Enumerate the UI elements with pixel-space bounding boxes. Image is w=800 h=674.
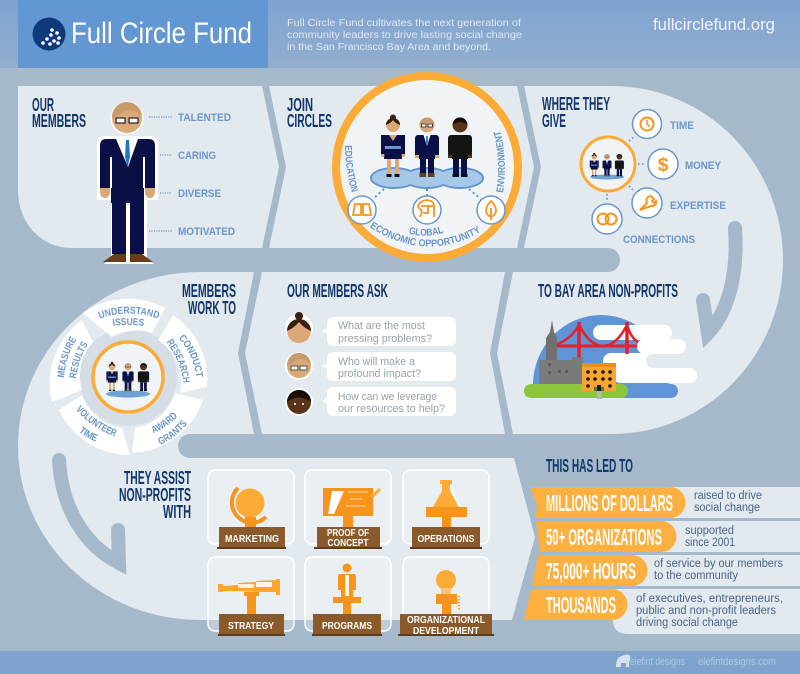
result: 75,000+ hours	[532, 555, 800, 586]
header description: community leaders to drive lasting social change	[287, 29, 522, 41]
result: 75,000+ hours: of service by our members	[654, 558, 783, 570]
icon: money: $	[658, 155, 669, 176]
member traits: DIVERSE	[178, 188, 221, 200]
result: thousands	[524, 589, 800, 634]
heading: our members: MEMBERS	[32, 111, 86, 131]
dotted links	[607, 137, 646, 202]
question three	[285, 387, 456, 416]
question three: our resources to help?	[338, 403, 445, 415]
circle labels: ECONOMIC OPPORTUNITY	[370, 222, 479, 247]
logo wordmark: Full Circle Fund	[71, 17, 252, 50]
give labels	[623, 120, 726, 246]
card: organizational development: ORGANIZATIONAL	[407, 615, 485, 626]
circle labels: GLOBAL	[409, 226, 444, 236]
clouds	[593, 325, 697, 383]
card: marketing: MARKETING	[225, 534, 279, 545]
result: thousands: public and non-profit leaders	[636, 605, 776, 617]
icon: global head	[413, 196, 441, 224]
heading: members work to: WORK TO	[188, 298, 236, 318]
sky	[533, 315, 669, 385]
icon: elephant	[616, 654, 630, 667]
wheel segments	[50, 299, 207, 455]
heading: they assist non-profits with	[119, 468, 191, 522]
heading: to bay area non-profits: TO BAY AREA NON-PROFITS	[538, 281, 678, 301]
card: strategy	[208, 557, 294, 636]
give labels: CONNECTIONS	[623, 234, 695, 246]
result: millions of dollars: raised to drive	[694, 490, 762, 502]
icon: education book	[348, 196, 376, 224]
heading: members work to	[182, 281, 236, 318]
heading: this has led to: THIS HAS LED TO	[546, 456, 633, 476]
members work to wheel	[50, 298, 208, 455]
wheel labels: MEASURE	[57, 336, 76, 378]
question two: Who will make a	[338, 356, 416, 368]
member traits: CARING	[178, 150, 216, 162]
result: 50+ organizations: 50+ ORGANIZATIONS	[546, 524, 662, 550]
heading: our members: OUR	[32, 95, 54, 115]
footer band	[0, 651, 800, 674]
heading: where they give: GIVE	[542, 111, 566, 131]
result: 75,000+ hours: 75,000+ HOURS	[546, 558, 636, 584]
circle labels: EDUCATION	[345, 146, 358, 192]
heading: where they give: WHERE THEY	[542, 94, 610, 114]
header description	[287, 17, 522, 53]
three figures	[381, 114, 472, 177]
clouds	[370, 167, 484, 189]
card: organizational development	[398, 557, 494, 637]
panel: join circles	[269, 86, 534, 248]
cloud gap	[646, 354, 706, 368]
result: thousands: driving social change	[636, 617, 738, 629]
wheel labels	[57, 306, 204, 444]
panel: our members ask	[245, 272, 505, 434]
result: thousands: THOUSANDS	[546, 592, 616, 618]
card: programs	[305, 557, 391, 636]
central circle	[581, 137, 635, 191]
card: proof of concept: PROOF OF	[327, 528, 369, 539]
wheel labels: AWARD	[152, 412, 176, 434]
wheel labels: RESEARCH	[166, 338, 190, 383]
member traits	[149, 112, 235, 238]
header band	[0, 0, 800, 68]
bay	[600, 384, 678, 398]
header description: Full Circle Fund cultivates the next generation of	[287, 17, 521, 29]
wheel labels: UNDERSTAND	[98, 306, 160, 318]
icon: money	[648, 149, 678, 179]
card: marketing	[208, 470, 294, 549]
where they give diagram	[581, 110, 726, 246]
give labels: EXPERTISE	[670, 200, 726, 212]
city illustration	[524, 315, 706, 399]
arrow: left curve	[59, 460, 119, 563]
footer credits: elefint designs	[630, 656, 685, 668]
heading: join circles: CIRCLES	[287, 111, 332, 131]
skyscraper	[546, 320, 557, 362]
heading: members work to: MEMBERS	[182, 281, 236, 301]
heading: join circles	[287, 95, 332, 131]
icon: environment leaf	[477, 196, 505, 224]
result: millions of dollars: social change	[694, 502, 760, 514]
heading: they assist non-profits with: THEY ASSIST	[124, 468, 191, 488]
heading: our members	[32, 95, 86, 131]
icon: expertise	[632, 188, 662, 218]
wheel labels: GRANTS	[158, 420, 186, 444]
icon: time	[632, 110, 662, 138]
card: operations: OPERATIONS	[418, 534, 475, 545]
wheel labels: ISSUES	[112, 318, 144, 326]
question two	[285, 352, 456, 381]
panel: where they give and bay area	[497, 86, 783, 434]
orange building	[582, 363, 616, 391]
result: thousands: of executives, entrepreneurs,	[636, 593, 783, 605]
question three: How can we leverage	[338, 391, 437, 403]
card: organizational development: DEVELOPMENT	[413, 626, 479, 637]
heading: they assist non-profits with: WITH	[163, 502, 191, 522]
heading: join circles: JOIN	[287, 95, 313, 115]
member traits: TALENTED	[178, 112, 231, 124]
wheel labels: RESULTS	[69, 342, 88, 378]
heading: they assist non-profits with: NON-PROFITS	[119, 485, 191, 505]
wheel labels: VOLUNTEER	[77, 405, 116, 436]
website url: fullcirclefund.org	[653, 15, 775, 34]
dotted links	[373, 189, 481, 199]
panel: members work to and assist	[18, 272, 535, 620]
wheel labels: CONDUCT	[180, 335, 204, 377]
footer credits	[616, 654, 776, 668]
grey band lower	[178, 434, 523, 458]
result: 75,000+ hours: to the community	[654, 570, 738, 582]
member figure	[97, 102, 158, 264]
question two: profound impact?	[338, 368, 421, 380]
heading: our members ask: OUR MEMBERS ASK	[287, 281, 388, 301]
footer credits: elefintdesigns.com	[698, 656, 776, 668]
green lawn	[524, 384, 628, 398]
card: operations	[403, 470, 489, 549]
grey band upper	[60, 248, 620, 272]
logo block	[18, 0, 268, 68]
result: 50+ organizations: supported	[685, 525, 734, 537]
result: 50+ organizations: since 2001	[685, 537, 735, 549]
give labels: TIME	[670, 120, 694, 132]
circle labels: ENVIRONMENT	[494, 132, 505, 192]
icon: connections	[592, 204, 622, 234]
card: proof of concept: CONCEPT	[328, 538, 368, 549]
arrow: right curve	[703, 228, 736, 333]
card: programs: PROGRAMS	[322, 621, 372, 632]
question one: pressing problems?	[338, 333, 432, 345]
member traits: MOTIVATED	[178, 226, 235, 238]
panel: our members	[18, 86, 279, 248]
grey buildings	[539, 357, 583, 385]
wheel labels: TIME	[80, 426, 98, 442]
join circles diagram	[332, 72, 522, 262]
icon: logo circle	[32, 18, 66, 50]
header description: in the San Francisco Bay Area and beyond.	[287, 41, 491, 53]
heading: where they give	[542, 94, 610, 131]
question one	[285, 312, 456, 346]
give labels: MONEY	[685, 160, 722, 172]
card: proof of concept	[305, 470, 391, 549]
circle labels	[345, 132, 505, 247]
question one: What are the most	[338, 320, 425, 332]
card: strategy: STRATEGY	[228, 621, 274, 632]
golden gate bridge	[557, 322, 638, 357]
